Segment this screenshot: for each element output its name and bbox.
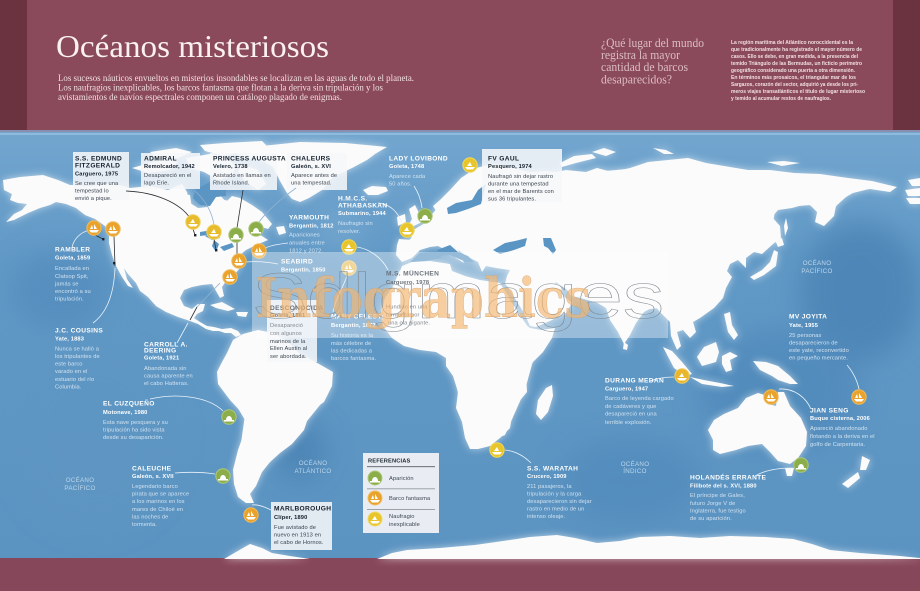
text: el cuzqueno: Motonave, 1980 bbox=[103, 410, 147, 416]
text: joyita: este yate, reconvertido bbox=[789, 348, 849, 354]
text: carroll a. deering: causa aparente en bbox=[144, 374, 193, 380]
label: oceano pacifico west: OCÉANO bbox=[66, 477, 94, 484]
question heading: registra la mayor bbox=[601, 48, 681, 62]
text: rambler: Encallada en bbox=[55, 266, 89, 272]
text: lady lovibond: LADY LOVIBOND bbox=[389, 156, 448, 162]
sri lanka bbox=[623, 342, 628, 350]
borneo sulawesi sumatra java bbox=[697, 342, 719, 366]
label: oceano pacifico west bbox=[64, 477, 96, 492]
icon: naufragio fitzgerald bbox=[186, 215, 200, 229]
text: waratah bbox=[527, 466, 592, 520]
text: admiral: Desapareció en el bbox=[144, 173, 192, 179]
arctic islands bbox=[200, 141, 268, 156]
text: j.c. cousins: Nunca se halló a bbox=[55, 346, 100, 352]
text: chaleurs: Aparece antes de bbox=[291, 173, 337, 179]
icon: barco fantasma marlborough bbox=[244, 508, 258, 522]
icon: barco fantasma seabird bbox=[232, 254, 246, 268]
question heading bbox=[601, 36, 704, 86]
text: fitzgerald: tempestad lo bbox=[75, 188, 109, 194]
text: chaleurs bbox=[291, 156, 337, 186]
text: desconocida bbox=[270, 305, 323, 360]
icon: aparicion augusta bbox=[229, 228, 243, 242]
text: jian seng: flotando a la deriva en el bbox=[810, 434, 875, 440]
text: seabird: Bergantín, 1850 bbox=[281, 268, 326, 274]
text: fv gaul: en el mar de Barents con bbox=[488, 189, 554, 195]
icon: aparicion lady lovibond bbox=[418, 209, 432, 223]
label: oceano atlantico: ATLÁNTICO bbox=[295, 468, 331, 475]
text: rambler: Clatsop Spit, bbox=[55, 274, 89, 280]
text: carroll a. deering: DEERING bbox=[144, 348, 176, 354]
uk ireland bbox=[408, 205, 422, 226]
text: marlborough: Fue avistado de bbox=[274, 525, 316, 531]
answer paragraph: meros viajes transatlánticos el título de lugar misterioso bbox=[731, 89, 865, 95]
text: el cuzqueno: Esta nave pesquera y su bbox=[103, 420, 168, 426]
text: j.c. cousins: Yate, 1883 bbox=[55, 336, 84, 342]
text: admiral: lago Erie. bbox=[144, 180, 169, 186]
text: lady lovibond: Aparece cada bbox=[389, 174, 426, 180]
text: chaleurs: una tempestad. bbox=[291, 180, 332, 186]
white label panels bbox=[73, 149, 562, 550]
text: caleuche bbox=[132, 466, 189, 528]
text: chaleurs: CHALEURS bbox=[291, 156, 331, 162]
text: el cuzqueno: desde su desaparición. bbox=[103, 435, 164, 441]
icon: naufragio admiral bbox=[207, 225, 221, 239]
icon: naufragio waratah bbox=[490, 443, 504, 457]
text: rambler: jamás se bbox=[54, 282, 79, 288]
text: durang medan bbox=[605, 378, 674, 426]
panel: princess augusta bbox=[210, 153, 277, 190]
text: jian seng: Apareció abandonado bbox=[810, 426, 868, 432]
text: fitzgerald: S.S. EDMUND bbox=[75, 156, 122, 162]
icon: naufragio athabaskan bbox=[400, 223, 414, 237]
text: athabaskan bbox=[338, 196, 388, 235]
text: fitzgerald: Carguero, 1975 bbox=[75, 172, 118, 178]
ocean bbox=[0, 130, 920, 558]
label: oceano pacifico east: PACÍFICO bbox=[801, 268, 833, 275]
panel: desconocida bbox=[267, 300, 317, 362]
text: desconocida: con algunos bbox=[270, 331, 302, 337]
text: j.c. cousins bbox=[55, 328, 103, 390]
text: fv gaul: durante una tempestad bbox=[488, 182, 549, 188]
text: holandes errante: HOLANDÉS ERRANTE bbox=[690, 472, 767, 482]
text: holandes errante: de su aparición. bbox=[690, 516, 732, 522]
text: waratah: tripulación y la carga bbox=[527, 492, 582, 498]
left dark band bbox=[0, 0, 27, 130]
north america shape bbox=[3, 175, 272, 337]
leader lines bbox=[72, 186, 859, 510]
panel: marlborough bbox=[271, 502, 332, 550]
icon: barco fantasma joyita bbox=[852, 390, 866, 404]
text: athabaskan: Naufragio sin bbox=[338, 221, 373, 227]
text: marlborough: el cabo de Hornos. bbox=[274, 540, 324, 546]
text: carroll a. deering bbox=[144, 342, 193, 387]
text: yarmouth: anuales entre bbox=[289, 240, 325, 246]
text: j.c. cousins: J.C. COUSINS bbox=[55, 328, 103, 334]
legend icon: naufragio bbox=[368, 512, 382, 526]
title: Océanos misteriosos bbox=[56, 28, 329, 64]
label: oceano indico bbox=[621, 461, 649, 475]
africa bbox=[381, 261, 555, 449]
text: yarmouth: Bergantín, 1812 bbox=[289, 224, 334, 230]
text: fitzgerald bbox=[75, 156, 122, 202]
text: durang medan: Carguero, 1947 bbox=[605, 386, 648, 392]
question heading: ¿Qué lugar del mundo bbox=[601, 36, 704, 50]
legend bbox=[363, 453, 439, 533]
legend icon: aparicion bbox=[368, 471, 382, 485]
text: caleuche: pirata que se aparece bbox=[132, 492, 189, 498]
icon: aparicion chaleurs bbox=[249, 222, 263, 236]
text: munchen: una ola gigante. bbox=[388, 320, 430, 326]
text: admiral bbox=[144, 156, 195, 186]
newfoundland, cuba, hispaniola bbox=[276, 226, 286, 235]
new guinea bbox=[753, 361, 798, 384]
text: desconocida: DESCONOCIDA bbox=[270, 305, 323, 312]
text: athabaskan: ATHABASKAN bbox=[338, 202, 388, 210]
text: durang medan: de cadáveres y que bbox=[605, 404, 656, 410]
answer paragraph: y temido al acumular restos de naufragios. bbox=[731, 96, 832, 102]
watermark: Infographics bbox=[255, 266, 591, 330]
text: waratah: desaparecieron sin dejar bbox=[527, 499, 592, 505]
text: fitzgerald: FITZGERALD bbox=[75, 162, 120, 170]
text: munchen: M.S. MÜNCHEN bbox=[386, 268, 439, 278]
text: caleuche: Legendario barco bbox=[132, 484, 178, 490]
text: j.c. cousins: varado en el bbox=[55, 369, 88, 375]
text: rambler: Goleta, 1859 bbox=[55, 256, 90, 262]
text: j.c. cousins: este barco bbox=[55, 362, 83, 368]
text: athabaskan: resolver. bbox=[338, 229, 361, 235]
label: oceano pacifico east: OCÉANO bbox=[803, 260, 831, 267]
answer paragraph: En términos más prosaicos, el triangular mar de los bbox=[731, 75, 856, 81]
icon: barco fantasma yarmouth bbox=[252, 244, 266, 258]
text: chaleurs: Galeón, s. XVI bbox=[291, 164, 331, 170]
label: oceano pacifico west: PACÍFICO bbox=[64, 485, 96, 492]
text: joyita bbox=[789, 314, 849, 362]
text: carroll a. deering: Goleta, 1921 bbox=[144, 356, 179, 362]
answer paragraph: casos. Ello se debe, en gran medida, a la presencia del bbox=[731, 54, 859, 60]
africa interior patches bbox=[385, 270, 530, 355]
south america bbox=[217, 330, 333, 503]
text: mary celeste: Su historia es la bbox=[331, 333, 374, 339]
text: yarmouth bbox=[289, 214, 334, 254]
text: durang medan: desapareció en una bbox=[605, 412, 657, 418]
label: oceano atlantico bbox=[295, 460, 331, 475]
text: durang medan: Barco de leyenda cargado bbox=[605, 396, 674, 402]
text: joyita: en pequeño mercante. bbox=[789, 356, 848, 362]
world map bbox=[0, 130, 920, 559]
label: oceano indico: ÍNDICO bbox=[623, 468, 647, 475]
question heading: cantidad de barcos bbox=[601, 60, 688, 74]
text: marlborough: nuevo en 1913 en bbox=[274, 532, 321, 538]
text: caleuche: CALEUCHE bbox=[132, 466, 172, 472]
text: mary celeste: barcos fantasma. bbox=[331, 356, 377, 362]
text: munchen bbox=[386, 268, 439, 326]
question heading: desaparecidos? bbox=[601, 72, 672, 86]
bottom band bbox=[0, 558, 920, 591]
icon: barco fantasma cousins bbox=[106, 222, 120, 236]
text: desconocida: marinos de la bbox=[270, 339, 306, 345]
text: lady lovibond: Goleta, 1748 bbox=[389, 164, 424, 170]
text: holandes errante: El príncipe de Gales, bbox=[690, 493, 745, 499]
icon: barco fantasma deering bbox=[223, 270, 237, 284]
eurasia bbox=[396, 158, 897, 350]
text: carroll a. deering: el cabo Hatteras. bbox=[144, 381, 189, 387]
watermark: Sdlgmages bbox=[252, 260, 664, 332]
text: jian seng: golfo de Carpentaria. bbox=[810, 442, 866, 448]
answer paragraph: que tradicionalmente ha registrado el mayor número de bbox=[731, 47, 862, 53]
australia bbox=[708, 392, 807, 464]
intro text: Los sucesos náuticos envueltos en misterios insondables se localizan en las aguas de todo el planeta. bbox=[58, 74, 414, 84]
text: j.c. cousins: Columbia. bbox=[55, 384, 82, 390]
philippines japan bbox=[724, 312, 738, 340]
seas and lakes bbox=[193, 182, 556, 262]
new zealand bbox=[860, 456, 870, 470]
text: carroll a. deering: Abandonada sin bbox=[144, 366, 187, 372]
text: caleuche: a los marinos en los bbox=[132, 499, 185, 505]
ship markers bbox=[87, 158, 866, 522]
text: seabird: SEABIRD bbox=[281, 258, 313, 266]
text: j.c. cousins: los tripulantes de bbox=[55, 354, 100, 360]
text: princess augusta bbox=[213, 156, 286, 186]
text: yarmouth: 1812 y 2072. bbox=[289, 248, 323, 254]
text: joyita: MV JOYITA bbox=[789, 314, 827, 320]
answer paragraph: geográfico considerado una puerta a otra dimensión. bbox=[731, 68, 856, 74]
text: lady lovibond bbox=[389, 156, 448, 188]
text: princess augusta: Asistado en llamas en bbox=[213, 173, 271, 179]
top banner bbox=[0, 0, 920, 130]
legend: Barco fantasma bbox=[389, 496, 431, 502]
text: mary celeste bbox=[331, 314, 387, 362]
text: holandes errante: futuro Jorge V de bbox=[690, 501, 735, 507]
icon: aparicion caleuche bbox=[216, 469, 230, 483]
text: seabird bbox=[281, 258, 326, 274]
icon: aparicion holandes errante bbox=[794, 458, 808, 472]
text: yarmouth: Apariciones bbox=[289, 232, 320, 238]
text: rambler: encontró a su bbox=[55, 289, 91, 295]
text: fv gaul: sus 36 tripulantes. bbox=[488, 196, 536, 202]
text: desconocida: Desapareció bbox=[270, 323, 303, 329]
text: athabaskan: H.M.C.S. bbox=[338, 196, 368, 202]
arctic eurasia islands bbox=[560, 154, 596, 167]
label: oceano atlantico: OCÉANO bbox=[299, 460, 327, 467]
text: el cuzqueno: tripulación ha sido vista bbox=[103, 428, 165, 434]
text: mary celeste: MARY CELESTE bbox=[331, 314, 387, 320]
text: caleuche: las noches de bbox=[132, 514, 168, 520]
south america interior patches bbox=[220, 335, 330, 420]
icon: barco fantasma jian seng bbox=[764, 390, 778, 404]
text: mary celeste: más célebre de bbox=[331, 341, 371, 347]
text: waratah: intenso oleaje. bbox=[527, 514, 565, 520]
text: princess augusta: Velero, 1738 bbox=[213, 164, 248, 170]
label: oceano indico: OCÉANO bbox=[621, 461, 649, 468]
text: yarmouth: YARMOUTH bbox=[289, 214, 329, 222]
icon: barco fantasma rambler bbox=[87, 221, 101, 235]
text: athabaskan: Submarino, 1944 bbox=[338, 211, 386, 217]
text: holandes errante: Inglaterra, fue testigo bbox=[690, 508, 746, 514]
ship labels bbox=[54, 156, 875, 546]
text: joyita: 25 personas bbox=[789, 333, 821, 339]
text: jian seng bbox=[810, 408, 875, 448]
legend icon: barco fantasma bbox=[368, 491, 382, 505]
text: admiral: ADMIRAL bbox=[144, 156, 177, 162]
label: oceano pacifico east bbox=[801, 260, 833, 275]
icon: naufragio fv gaul bbox=[463, 158, 477, 172]
legend: Aparición bbox=[389, 476, 414, 482]
legend: REFERENCIAS bbox=[368, 458, 410, 464]
continental shelves bbox=[3, 141, 920, 559]
text: desconocida: Goleta, 1881 bbox=[270, 313, 305, 319]
legend: Naufragio bbox=[389, 514, 415, 520]
black position dots bbox=[102, 234, 238, 264]
text: caleuche: mares de Chiloé en bbox=[132, 507, 183, 513]
answer paragraph: Sargazos, corazón del sector, adquirió ya desde los pri- bbox=[731, 82, 858, 88]
iceland bbox=[363, 186, 388, 195]
panel: fv gaul bbox=[482, 149, 562, 202]
text: marlborough: MARLBOROUGH bbox=[274, 506, 331, 512]
text: caleuche: tormenta. bbox=[132, 522, 157, 528]
text: jian seng: Buque cisterna, 2006 bbox=[810, 416, 870, 422]
answer paragraph: temido Triángulo de las Bermudas, un ficticio perímetro bbox=[731, 61, 862, 67]
greenland bbox=[233, 142, 387, 202]
text: joyita: desaparecieron de bbox=[789, 340, 838, 346]
watermark bbox=[252, 252, 668, 338]
eurasia interior patches bbox=[405, 170, 600, 245]
text: mary celeste: Bergantín, 1872 bbox=[331, 323, 376, 329]
panel: fitzgerald bbox=[73, 152, 129, 200]
text: waratah: Crucero, 1909 bbox=[527, 474, 567, 480]
text: durang medan: terrible explosión. bbox=[605, 420, 652, 426]
text: munchen: tormenta por bbox=[386, 312, 419, 318]
text: mary celeste: las dedicadas a bbox=[331, 348, 373, 354]
text: joyita: Yate, 1955 bbox=[789, 323, 818, 329]
text: j.c. cousins: estuario del río bbox=[55, 377, 94, 383]
text: jian seng: JIAN SENG bbox=[810, 408, 849, 414]
icon: naufragio durang medan bbox=[675, 369, 689, 383]
text: princess augusta: Rhode Island. bbox=[213, 180, 250, 186]
intro text bbox=[58, 74, 414, 103]
text: marlborough bbox=[274, 506, 331, 546]
land masses bbox=[3, 141, 920, 559]
right dark band bbox=[893, 0, 920, 130]
answer paragraph bbox=[731, 40, 865, 102]
text: princess augusta: PRINCESS AUGUSTA bbox=[213, 156, 286, 162]
madagascar bbox=[536, 385, 553, 420]
north america interior patches bbox=[25, 182, 110, 215]
panel: admiral bbox=[141, 153, 200, 189]
legend: inexplicable bbox=[389, 522, 420, 528]
text: fv gaul: Naufragó sin dejar rastro bbox=[488, 174, 553, 180]
text: rambler: tripulación. bbox=[55, 296, 84, 302]
text: rambler bbox=[54, 246, 91, 302]
text: caleuche: Galeón, s. XVII bbox=[132, 474, 174, 480]
text: munchen: Carguero, 1978 bbox=[386, 280, 429, 286]
text: carroll a. deering: CARROLL A. bbox=[144, 342, 188, 348]
panel: chaleurs bbox=[287, 153, 347, 190]
intro text: avistamientos de navíos espectrales componen un catálogo plagado de enigmas. bbox=[58, 93, 342, 103]
text: admiral: Remolcador, 1942 bbox=[144, 164, 195, 170]
icon: aparicion cuzqueno bbox=[222, 410, 236, 424]
text: fv gaul: FV GAUL bbox=[488, 156, 519, 162]
text: holandes errante bbox=[690, 472, 767, 522]
text: waratah: rastro en medio de un bbox=[527, 506, 584, 512]
answer paragraph: La región marítima del Atlántico noroccidental es la bbox=[731, 40, 853, 46]
text: fv gaul bbox=[488, 156, 554, 202]
text: el cuzqueno bbox=[103, 398, 168, 441]
text: marlborough: Clíper, 1890 bbox=[274, 515, 307, 521]
ocean labels bbox=[64, 260, 833, 492]
text: durang medan: DURANG MEDAN bbox=[605, 378, 664, 384]
text: waratah: 211 pasajeros, la bbox=[527, 484, 572, 490]
icon: barco fantasma mary celeste bbox=[342, 261, 356, 275]
text: rambler: RAMBLER bbox=[55, 246, 90, 254]
text: fitzgerald: Se cree que una bbox=[75, 181, 119, 187]
text: holandes errante: Filibote del s. XVI, 1880 bbox=[690, 484, 757, 490]
text: lady lovibond: 50 años. bbox=[389, 182, 412, 188]
text: munchen: Hundido en una bbox=[386, 304, 428, 310]
text: fitzgerald: envió a pique. bbox=[75, 196, 112, 202]
text: desconocida: Ellen Austin al bbox=[270, 346, 307, 352]
antarctica bbox=[377, 535, 920, 559]
tasmania bbox=[785, 468, 794, 476]
text: waratah: S.S. WARATAH bbox=[527, 466, 578, 472]
deep ocean shading bbox=[10, 212, 920, 530]
icon: naufragio munchen bbox=[342, 240, 356, 254]
text: el cuzqueno: EL CUZQUEÑO bbox=[103, 398, 155, 408]
intro text: Los naufragios inexplicables, los barcos fantasma que flotan a la deriva sin tripulación y los bbox=[58, 82, 383, 94]
text: fv gaul: Pesquero, 1974 bbox=[488, 164, 533, 170]
text: desconocida: ser abordada. bbox=[270, 354, 307, 360]
